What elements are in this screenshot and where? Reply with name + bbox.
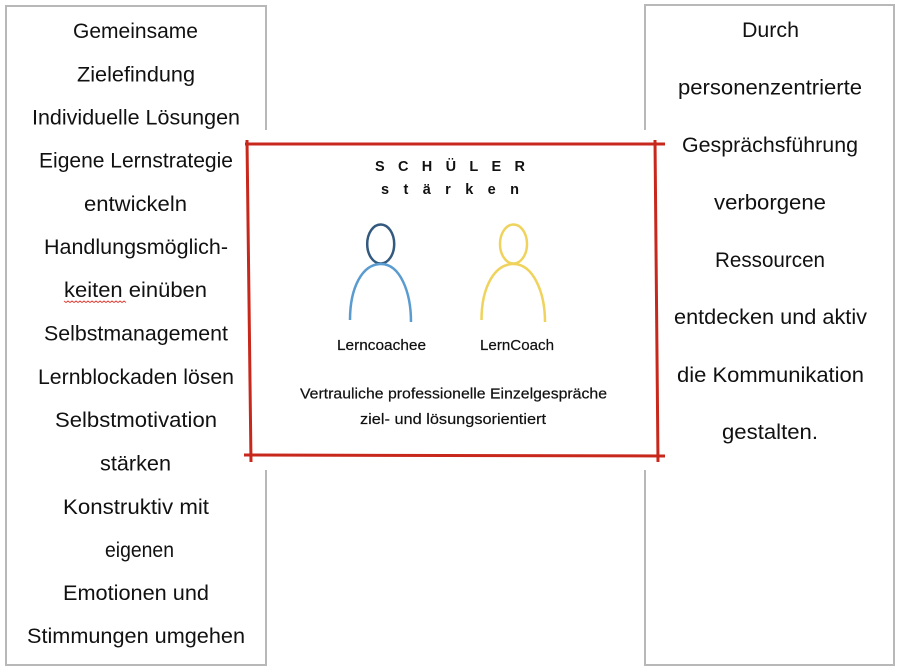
heading: SCHÜLER xyxy=(375,158,526,175)
left box text: Zielefindung xyxy=(77,64,195,86)
right box text: Ressourcen xyxy=(715,249,825,272)
panel: central box xyxy=(244,140,665,462)
panel: left box xyxy=(6,6,266,665)
left box text: Selbstmanagement xyxy=(44,322,228,346)
left box text: Lernblockaden lösen xyxy=(38,366,234,389)
left box outline xyxy=(6,6,266,665)
heading xyxy=(375,158,526,198)
left box text: Stimmungen umgehen xyxy=(27,625,245,648)
red frame xyxy=(244,140,665,462)
right box text: die Kommunikation xyxy=(677,364,864,387)
right box text: gestalten. xyxy=(722,421,818,444)
icon: LernCoach person xyxy=(482,224,545,322)
right box text: Gesprächsführung xyxy=(682,134,858,157)
spell-check squiggle xyxy=(64,301,126,302)
left box text: Gemeinsame xyxy=(73,20,198,43)
description text: Vertrauliche professionelle Einzelgespräche xyxy=(300,386,607,402)
left box text: stärken xyxy=(100,452,171,476)
right box text: Durch xyxy=(742,19,799,42)
left box text: Selbstmotivation xyxy=(55,409,217,432)
left box text: entwickeln xyxy=(84,193,187,216)
description text xyxy=(300,386,607,428)
left box text: Emotionen und xyxy=(63,582,209,605)
left box text: Konstruktiv mit xyxy=(63,496,209,519)
right box outline xyxy=(645,5,894,665)
left box text xyxy=(27,20,245,648)
panel: right box xyxy=(645,5,894,665)
right box text: personenzentrierte xyxy=(678,76,862,100)
right box text: verborgene xyxy=(714,192,826,214)
label: Lerncoachee: Lerncoachee xyxy=(337,337,426,354)
label: LernCoach: LernCoach xyxy=(480,337,554,354)
left box text: Eigene Lernstrategie xyxy=(39,150,233,172)
left box text: keiten einüben xyxy=(64,279,207,302)
left box text: eigenen xyxy=(105,539,174,562)
description text: ziel- und lösungsorientiert xyxy=(360,411,547,428)
right box text xyxy=(674,19,868,444)
left box text: Handlungsmöglich- xyxy=(44,236,228,259)
heading: stärken xyxy=(381,182,519,198)
right box text: entdecken und aktiv xyxy=(674,306,868,329)
left box text: Individuelle Lösungen xyxy=(32,106,240,130)
icon: Lerncoachee person xyxy=(350,224,411,322)
